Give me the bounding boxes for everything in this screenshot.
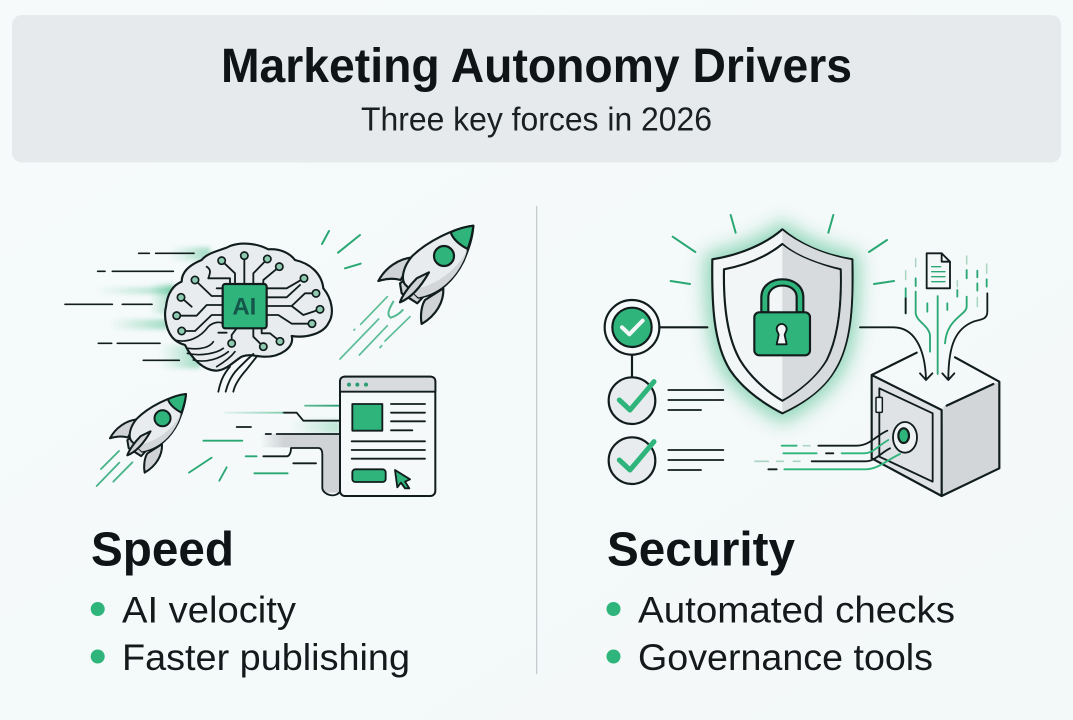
icon: web page with speed lines: [203, 377, 435, 496]
title banner: [12, 15, 1061, 162]
bullet list: speed: AI velocity: [122, 590, 297, 630]
icon: checklist: [605, 300, 723, 484]
panel: speed: [65, 226, 473, 678]
bullet list: security: Automated checks: [638, 590, 955, 630]
subtitle: Three key forces in 2026: [361, 100, 712, 138]
rays: [869, 240, 894, 284]
bullet list: speed: Faster publishing: [122, 637, 410, 678]
icon: AI brain with speed streaks: [65, 244, 332, 392]
heading: Speed: Speed: [91, 524, 234, 576]
heading: Security: Security: [607, 524, 795, 576]
bullet list: security: Governance tools: [638, 637, 933, 678]
icon: AI brain with speed streaks: AI: [232, 294, 256, 321]
icon: large rocket: [322, 226, 473, 359]
icon: safe with data streams: [755, 253, 999, 496]
title: Marketing Autonomy Drivers: [221, 40, 852, 93]
panel: security: [605, 215, 999, 678]
icon: small rocket: [97, 394, 227, 486]
bullet list: speed: [91, 590, 410, 678]
bullet list: security: [606, 590, 955, 678]
icon: shield with padlock: [671, 215, 859, 423]
